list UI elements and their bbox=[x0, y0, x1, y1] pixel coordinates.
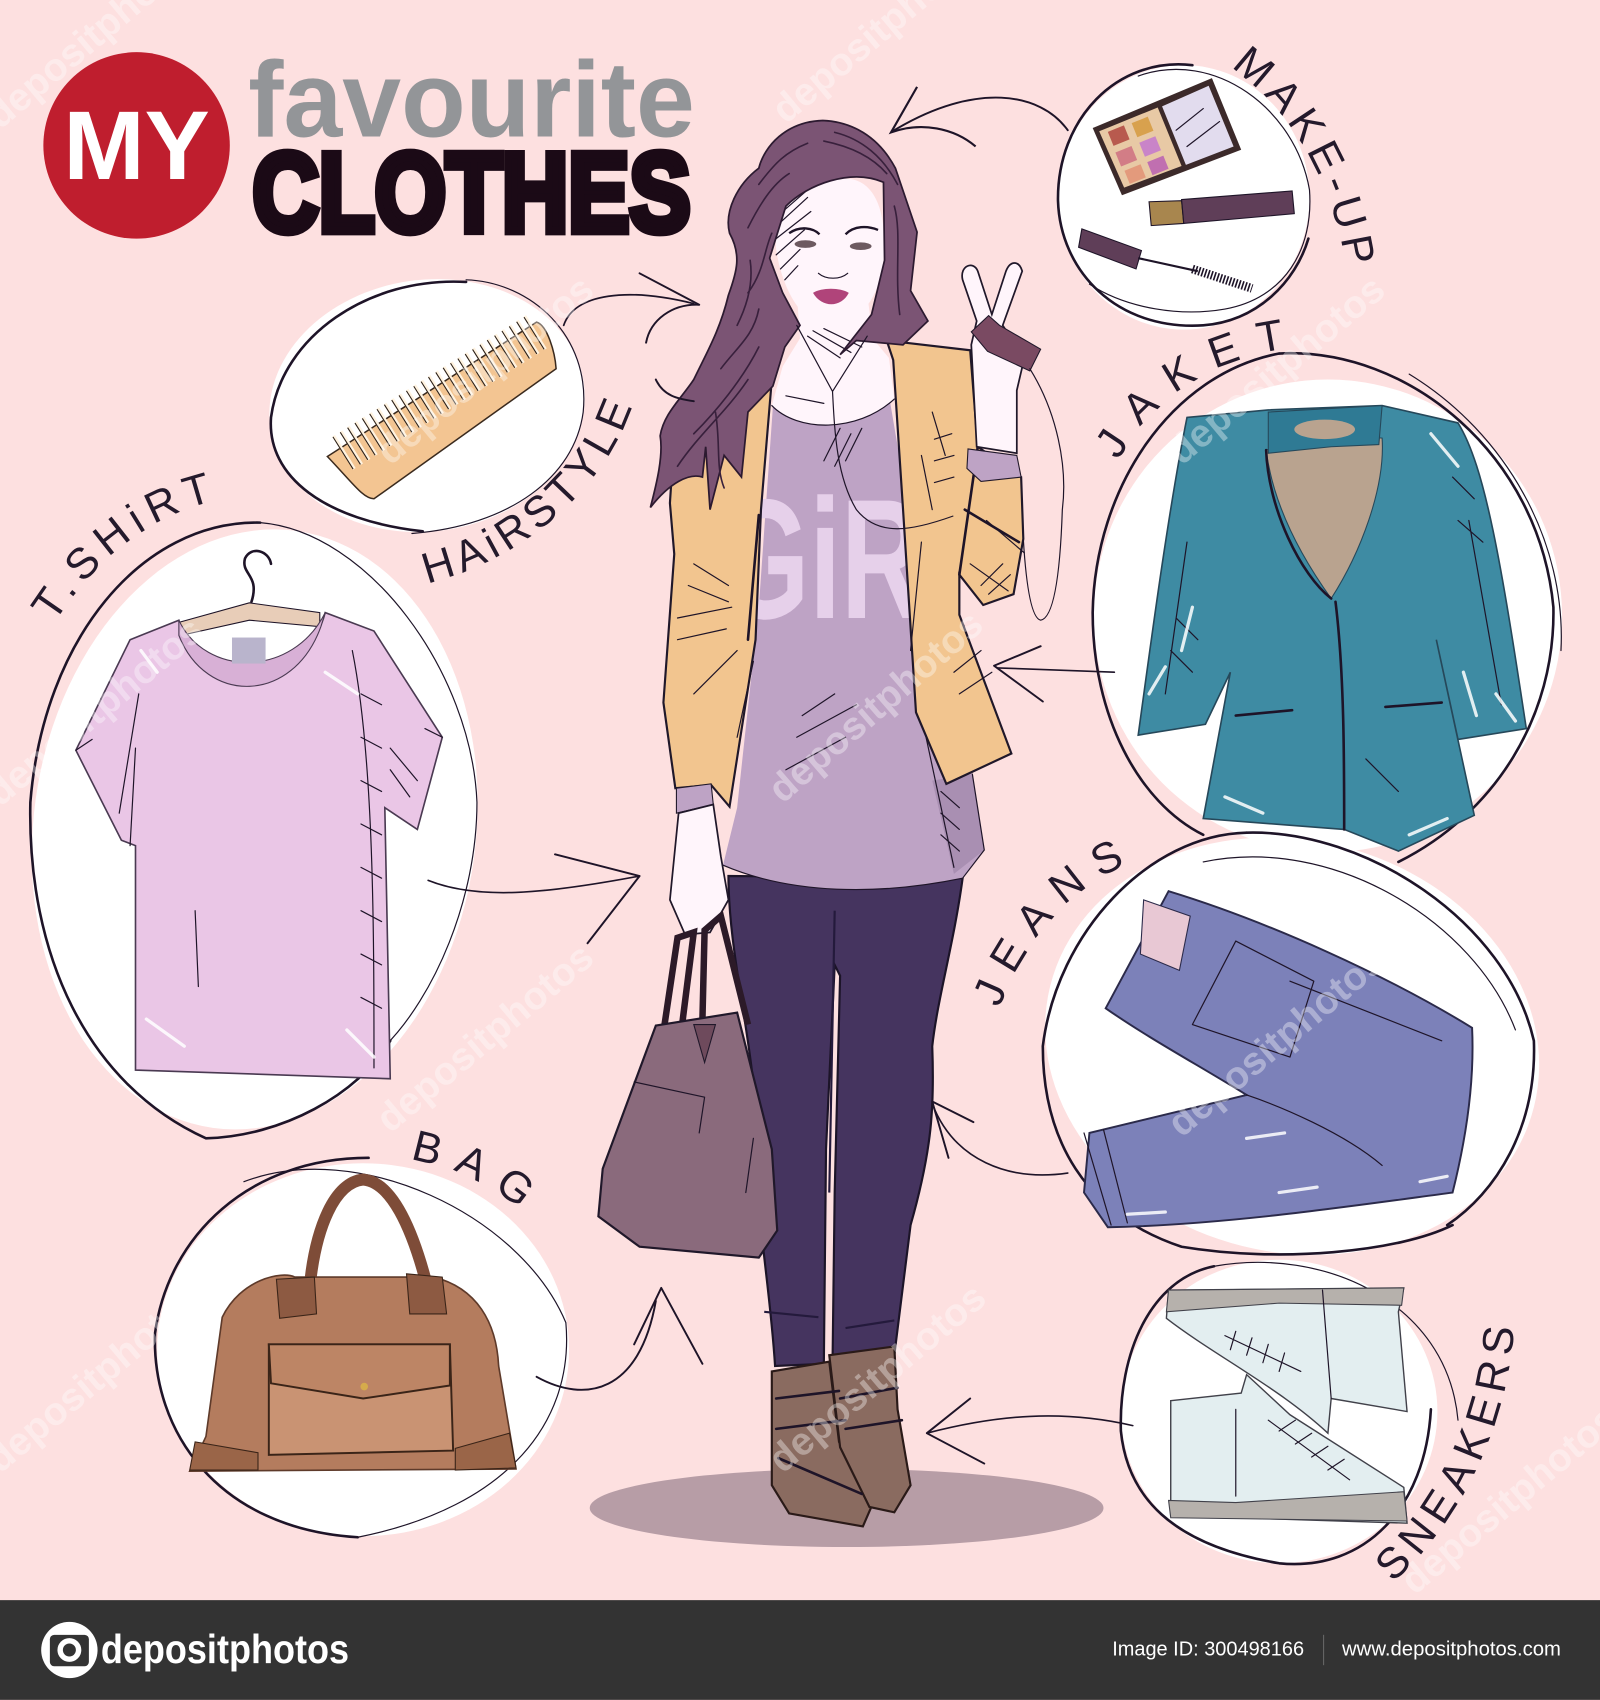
icon: eyeshadow palette bbox=[1093, 78, 1241, 195]
woman shadow bbox=[590, 1469, 1104, 1547]
arrow: sneakers bbox=[927, 1399, 1133, 1464]
left shoe bbox=[772, 1362, 874, 1526]
label: sneakers: SNEAKERS bbox=[1377, 1328, 1514, 1578]
icon: teal jacket bbox=[1138, 406, 1526, 851]
icon: t-shirt bbox=[76, 613, 442, 1079]
right shoe bbox=[829, 1346, 911, 1512]
icon: comb bbox=[327, 322, 556, 499]
icon: top sneaker bbox=[1166, 1288, 1407, 1433]
arrow: t-shirt bbox=[428, 854, 640, 943]
label: hairstyle: HAiRSTYLE bbox=[422, 398, 632, 583]
label: make-up: MAKE-UP bbox=[1234, 46, 1374, 260]
panel: bag bbox=[155, 1158, 569, 1537]
panel: jeans bbox=[1000, 786, 1584, 1306]
image id: Image ID: 300498166 bbox=[1112, 1638, 1304, 1660]
shirt text: GiR bbox=[721, 464, 923, 654]
right hand with peace sign bbox=[962, 263, 1024, 453]
icon: folded jeans bbox=[1084, 891, 1473, 1227]
arrow: hairstyle bbox=[564, 273, 699, 401]
icon: camera logo bbox=[41, 1622, 98, 1678]
label: jaket: JAKET bbox=[1098, 319, 1280, 457]
left hand bbox=[670, 804, 728, 935]
website: www.depositphotos.com bbox=[1341, 1638, 1561, 1660]
label: jeans: JEANS bbox=[975, 842, 1122, 1005]
arrow: jacket bbox=[994, 646, 1114, 701]
arrow: bag bbox=[537, 1288, 702, 1390]
t-shirt on figure bbox=[721, 401, 984, 890]
arrow: make-up bbox=[891, 87, 1068, 146]
watermarks: depositphotos bbox=[1160, 267, 1393, 473]
icon: hanger bbox=[179, 551, 320, 635]
title word: clothes: CLOTHES bbox=[253, 130, 691, 255]
icon: mascara bbox=[1079, 229, 1252, 288]
panel: jacket bbox=[1093, 353, 1562, 862]
panel: t-shirt bbox=[0, 500, 516, 1159]
carried bag bbox=[598, 916, 777, 1258]
footer bar bbox=[0, 1600, 1600, 1700]
cuff left bbox=[676, 784, 713, 813]
watermarks: depositphotos bbox=[368, 267, 602, 473]
watermarks: depositphotos bbox=[761, 1276, 994, 1481]
footer logo bbox=[41, 1622, 349, 1678]
neck and chest bbox=[772, 293, 894, 425]
panel: sneakers bbox=[1121, 1260, 1458, 1564]
label: bag: BAG bbox=[414, 1130, 532, 1204]
panel: hairstyle bbox=[253, 259, 601, 552]
panel: make-up bbox=[1058, 64, 1310, 330]
cuff right bbox=[967, 449, 1021, 481]
label: t-shirt: T.SHiRT bbox=[30, 472, 205, 614]
hair bbox=[650, 120, 928, 510]
figure: woman bbox=[598, 120, 1064, 1526]
blazer bbox=[663, 341, 1024, 807]
shoe straps bbox=[776, 1388, 902, 1494]
watermarks: depositphotos bbox=[368, 935, 602, 1141]
icon: bottom sneaker bbox=[1169, 1375, 1407, 1523]
watermarks: depositphotos bbox=[1160, 940, 1393, 1145]
red circle badge bbox=[43, 52, 230, 239]
leggings bbox=[728, 876, 963, 1366]
face bbox=[776, 179, 884, 328]
earphone wire bbox=[797, 325, 1064, 620]
watermarks: depositphotos bbox=[760, 602, 991, 811]
title bbox=[43, 40, 695, 255]
music player bbox=[971, 316, 1041, 371]
icon: lipstick bbox=[1149, 191, 1294, 226]
footer logo: depositphotos bbox=[101, 1626, 349, 1672]
title word: favourite: favourite bbox=[248, 40, 695, 160]
arrow: jeans bbox=[932, 1101, 1068, 1175]
red circle badge: MY bbox=[63, 91, 210, 200]
icon: brown handbag bbox=[190, 1180, 516, 1471]
